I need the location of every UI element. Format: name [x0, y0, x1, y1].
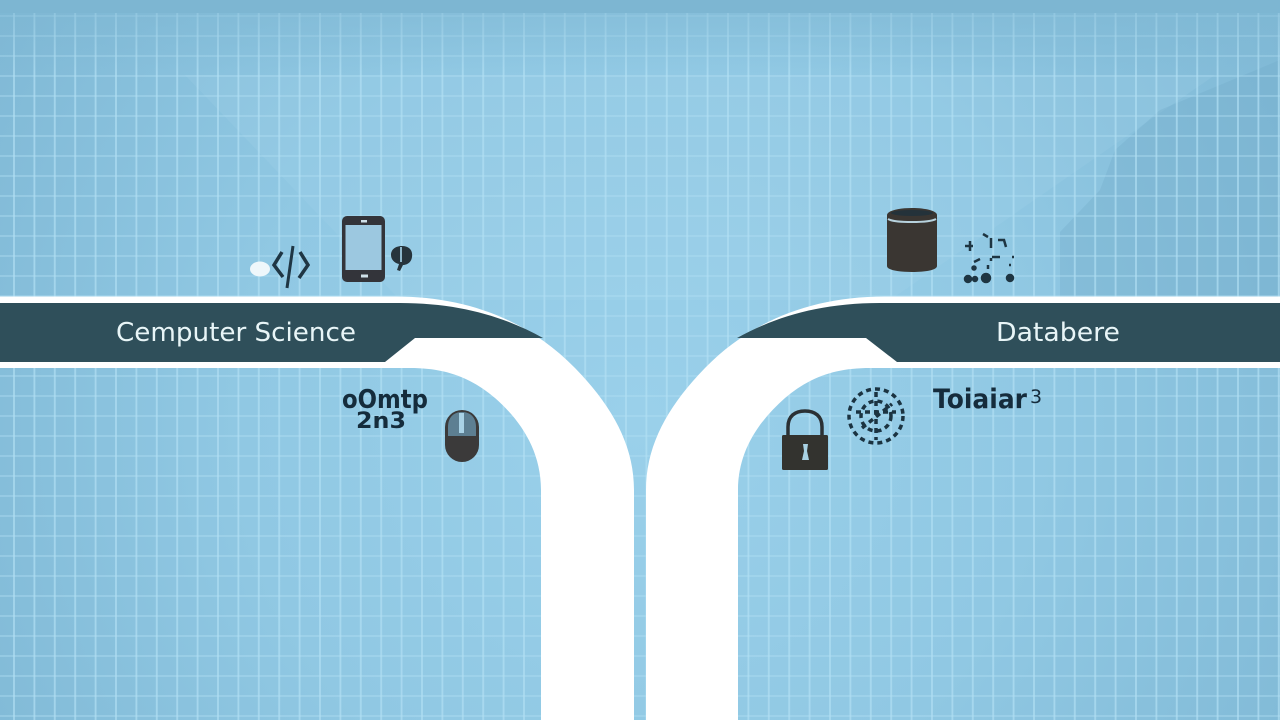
icon: speech bubble: [391, 246, 412, 271]
icon: smartphone: [342, 216, 385, 282]
icon: code brackets: [250, 246, 308, 288]
icon: database cylinder: [887, 208, 937, 272]
icon: computer mouse: [445, 410, 479, 462]
icon: database glyph text: 3: [1030, 386, 1042, 408]
road: left white curve: [0, 296, 634, 720]
road: right white curve: [646, 296, 1280, 720]
icon: dotted globe: [849, 389, 903, 443]
icon: computer glyph text: oOmtp: [342, 385, 428, 415]
icon: computer glyph text: 2n3: [356, 409, 406, 434]
heading: Computer Science: Cemputer Science: [116, 318, 356, 348]
icon: database glyph text: Toiaiar: [933, 384, 1028, 415]
icon: computer glyph text: [342, 385, 428, 434]
icon: network nodes: [965, 234, 1014, 282]
panel: Computer Science band: [0, 303, 543, 362]
panel: Database band: [737, 303, 1280, 362]
heading: Database: Databere: [996, 318, 1120, 348]
icon: padlock: [782, 411, 828, 470]
